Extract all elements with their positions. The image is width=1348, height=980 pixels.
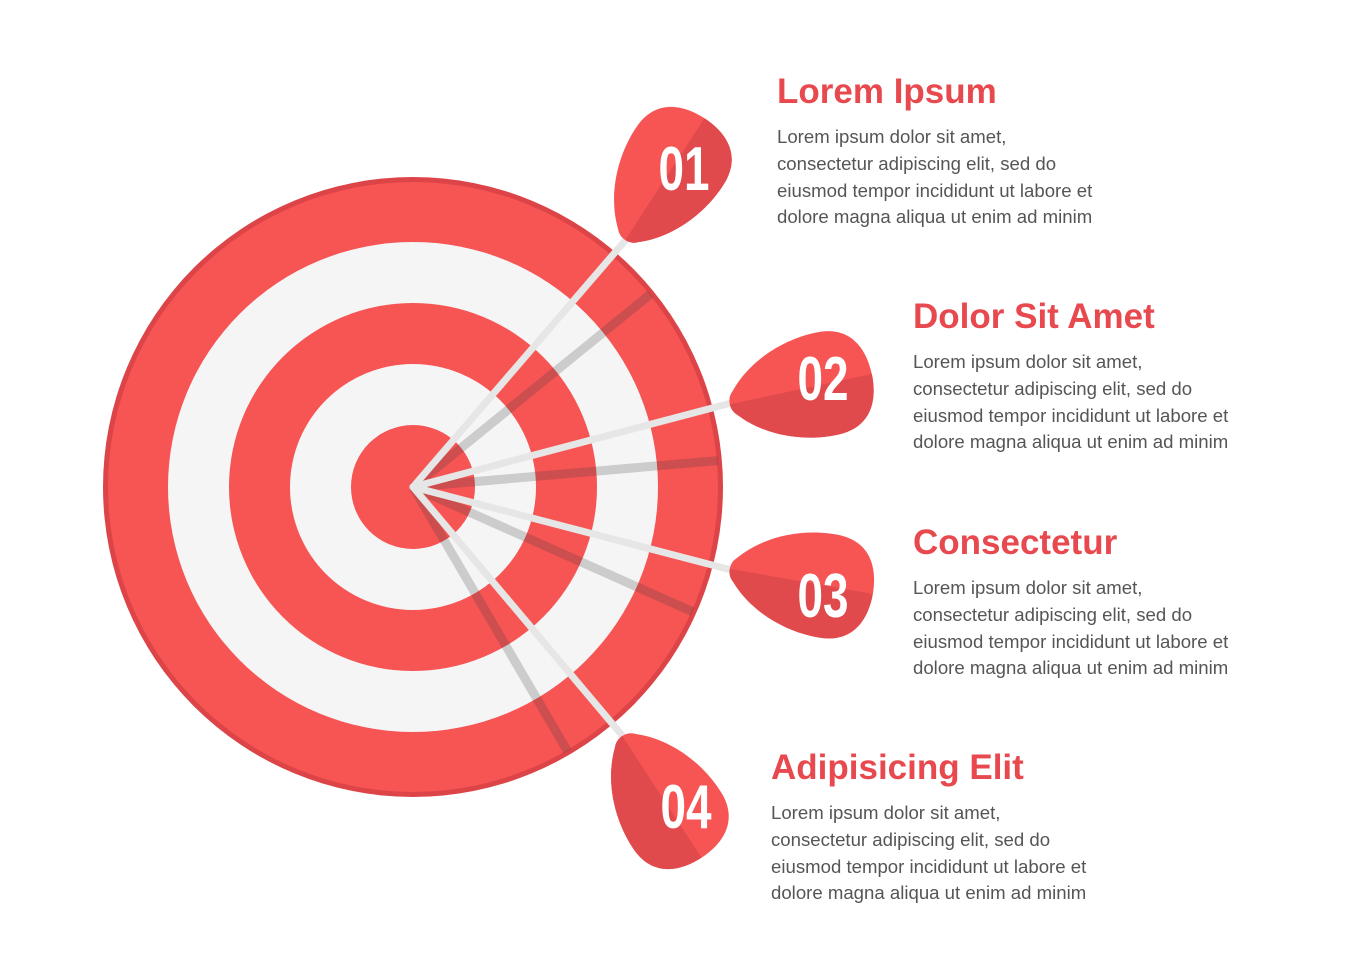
dart numbers <box>658 134 849 842</box>
text block 1: eiusmod tempor incididunt ut labore et <box>777 180 1092 201</box>
text block 4: eiusmod tempor incididunt ut labore et <box>771 856 1086 877</box>
text block 1 <box>777 72 1092 227</box>
text block 3: consectetur adipiscing elit, sed do <box>913 604 1192 625</box>
dart 04 <box>611 733 729 870</box>
dart stems <box>413 235 735 740</box>
text block 4: consectetur adipiscing elit, sed do <box>771 829 1050 850</box>
text block 4: dolore magna aliqua ut enim ad minim <box>771 882 1086 903</box>
text block 2: consectetur adipiscing elit, sed do <box>913 378 1192 399</box>
dart 02 <box>729 331 874 438</box>
text block 2: dolore magna aliqua ut enim ad minim <box>913 431 1228 452</box>
text block 1: Lorem Ipsum <box>777 72 997 111</box>
text block 1: Lorem ipsum dolor sit amet, <box>777 126 1006 147</box>
text block 3: Lorem ipsum dolor sit amet, <box>913 577 1142 598</box>
target diagram <box>103 106 874 870</box>
text block 3 <box>913 523 1228 678</box>
text block 3: eiusmod tempor incididunt ut labore et <box>913 631 1228 652</box>
dart numbers: 03 <box>797 561 849 631</box>
dart numbers: 01 <box>658 134 710 204</box>
stem shadows <box>413 288 725 752</box>
dart 01 <box>614 106 732 243</box>
dart numbers: 02 <box>797 344 849 414</box>
text block 2: eiusmod tempor incididunt ut labore et <box>913 405 1228 426</box>
dart 03 <box>730 532 874 638</box>
text block 4 <box>771 748 1086 903</box>
text block 1: dolore magna aliqua ut enim ad minim <box>777 206 1092 227</box>
text block 3: Consectetur <box>913 523 1117 562</box>
text block 2 <box>913 297 1228 452</box>
text block 4: Lorem ipsum dolor sit amet, <box>771 802 1000 823</box>
text block 4: Adipisicing Elit <box>771 748 1024 787</box>
target rings <box>103 177 723 797</box>
text block 1: consectetur adipiscing elit, sed do <box>777 153 1056 174</box>
dart numbers: 04 <box>660 772 712 842</box>
text block 2: Lorem ipsum dolor sit amet, <box>913 351 1142 372</box>
text block 3: dolore magna aliqua ut enim ad minim <box>913 657 1228 678</box>
text block 2: Dolor Sit Amet <box>913 297 1155 336</box>
